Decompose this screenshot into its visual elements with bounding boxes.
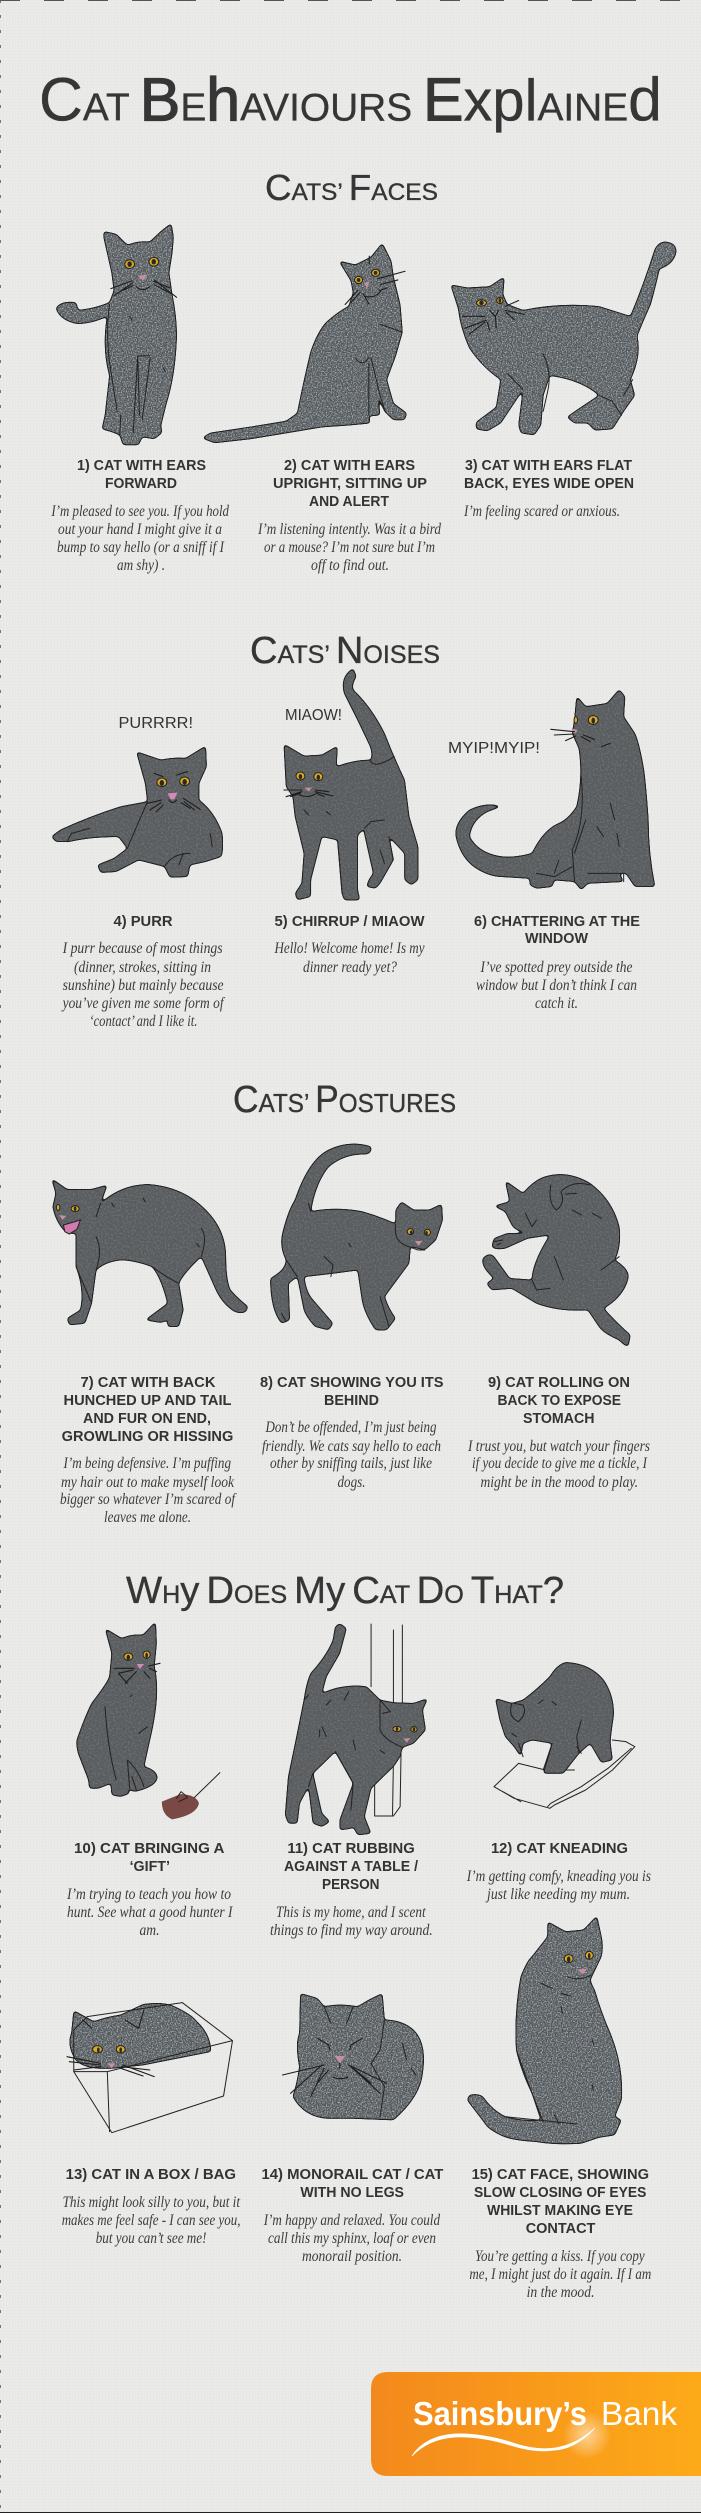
label bbox=[62, 1375, 233, 1445]
description: leaves me alone. bbox=[104, 1509, 191, 1526]
panel: cat 11 bbox=[270, 1623, 433, 1939]
description bbox=[62, 2194, 241, 2247]
label: 14) MONORAIL CAT / CAT bbox=[262, 2167, 444, 2183]
label: 15) CAT FACE, SHOWING bbox=[472, 2167, 649, 2183]
label: 13) CAT IN A BOX / BAG bbox=[66, 2167, 236, 2183]
description: hunt. See what a good hunter I bbox=[67, 1904, 233, 1921]
description: catch it. bbox=[535, 995, 578, 1012]
icon: table leg bbox=[371, 1624, 402, 1816]
description: dogs. bbox=[338, 1474, 366, 1491]
heading: cats' postures: CATS’ POSTURES bbox=[233, 1079, 456, 1121]
description bbox=[263, 2212, 440, 2265]
description bbox=[466, 1868, 651, 1903]
description: This is my home, and I scent bbox=[276, 1904, 426, 1921]
description bbox=[51, 503, 229, 574]
description: Don’t be offended, I’m just being bbox=[265, 1419, 437, 1436]
icon: kneading cat bbox=[495, 1662, 614, 1773]
label: 4) PURR bbox=[114, 914, 173, 930]
description: sunshine) but mainly because bbox=[63, 977, 224, 994]
description: things to find my way around. bbox=[270, 1922, 433, 1939]
logo: Sainsbury's Bank: Sainsbury’s bbox=[413, 2395, 587, 2432]
label: FORWARD bbox=[105, 476, 177, 492]
label: 9) CAT ROLLING ON bbox=[488, 1375, 630, 1391]
label: BEHIND bbox=[324, 1393, 379, 1409]
description: you’ve given me some form of bbox=[61, 995, 226, 1012]
description: monorail position. bbox=[302, 2248, 402, 2265]
description: just like needing my mum. bbox=[485, 1886, 630, 1903]
icon: cat with slow closing eyes bbox=[467, 1916, 622, 2144]
icon: cat with ears forward bbox=[56, 223, 177, 445]
description bbox=[257, 521, 441, 574]
label bbox=[74, 1841, 225, 1875]
description bbox=[262, 1419, 441, 1491]
description bbox=[476, 959, 637, 1012]
description: I’m listening intently. Was it a bird bbox=[257, 521, 441, 538]
description: might be in the mood to play. bbox=[480, 1474, 638, 1491]
icon: hunched cat bbox=[51, 1178, 248, 1327]
title: CAT BEhAVIOURS ExplAINEd bbox=[39, 66, 662, 134]
description bbox=[467, 1438, 650, 1491]
description: This might look silly to you, but it bbox=[63, 2194, 241, 2211]
icon: sitting cat bbox=[77, 1622, 160, 1797]
icon: cat rolling on back bbox=[483, 1174, 630, 1347]
label bbox=[474, 914, 640, 947]
description: if you decide to give me a tickle, I bbox=[472, 1455, 648, 1472]
label: 6) CHATTERING AT THE bbox=[474, 914, 640, 930]
label: UPRIGHT, SITTING UP bbox=[273, 476, 427, 492]
description: makes me feel safe - I can see you, bbox=[62, 2212, 241, 2229]
label: STOMACH bbox=[523, 1411, 594, 1427]
label: 8) CAT SHOWING YOU ITS bbox=[260, 1375, 444, 1391]
panel: cat 15 bbox=[467, 1916, 651, 2301]
description bbox=[274, 940, 425, 976]
label: 7) CAT WITH BACK bbox=[80, 1375, 216, 1391]
label: BACK TO EXPOSE bbox=[498, 1393, 621, 1409]
label bbox=[77, 458, 206, 492]
panel: cat 4 bbox=[51, 715, 226, 1030]
description: ‘contact’ and I like it. bbox=[89, 1013, 197, 1030]
panel: cat 8 bbox=[260, 1144, 444, 1491]
label: 3) CAT WITH EARS FLAT bbox=[465, 458, 632, 474]
icon: cat with ears flat back bbox=[451, 242, 676, 435]
label: HUNCHED UP AND TAIL bbox=[64, 1393, 232, 1409]
description bbox=[61, 940, 226, 1030]
speech: purr: PURRRR! bbox=[118, 715, 193, 732]
label: 11) CAT RUBBING bbox=[287, 1841, 415, 1857]
icon: chirruping cat bbox=[284, 668, 418, 900]
description: dinner ready yet? bbox=[303, 959, 397, 976]
label: AGAINST A TABLE / bbox=[284, 1859, 418, 1875]
panel: cat 2 bbox=[202, 243, 441, 574]
label: CONTACT bbox=[526, 2221, 596, 2237]
panel: cat 5 bbox=[274, 668, 425, 976]
description: I’m getting comfy, kneading you is bbox=[466, 1868, 651, 1885]
description: I’m trying to teach you how to bbox=[66, 1886, 231, 1903]
heading: cats' noises: CATS’ NOISES bbox=[250, 630, 440, 672]
heading: why does my cat do that: WHy DOES My CAT DO THAT? bbox=[126, 1570, 564, 1612]
label: AND ALERT bbox=[309, 494, 389, 510]
label bbox=[464, 458, 634, 492]
label: 10) CAT BRINGING A bbox=[74, 1841, 225, 1857]
label bbox=[260, 1375, 444, 1409]
description: me, I might just do it again. If I am bbox=[469, 2266, 651, 2283]
icon: cat showing its behind bbox=[270, 1144, 443, 1330]
description: or a mouse? I’m not sure but I’m bbox=[264, 539, 435, 556]
icon: mouse bbox=[162, 1773, 220, 1819]
panel: cat 7 bbox=[51, 1178, 248, 1526]
label: WHILST MAKING EYE bbox=[487, 2203, 633, 2219]
description: call this my sphinx, loaf or even bbox=[268, 2230, 436, 2247]
panel: cat 3 bbox=[451, 242, 676, 520]
label bbox=[273, 458, 427, 510]
panel: cat 10 bbox=[66, 1622, 233, 1939]
label bbox=[472, 2167, 649, 2237]
label: WITH NO LEGS bbox=[300, 2185, 404, 2201]
description bbox=[469, 2248, 651, 2301]
label bbox=[284, 1841, 418, 1893]
label: 2) CAT WITH EARS bbox=[284, 458, 415, 474]
speech: myip: MYIP!MYIP! bbox=[448, 740, 540, 757]
speech: miaow: MIAOW! bbox=[285, 707, 342, 724]
label bbox=[262, 2167, 444, 2201]
description: bump to say hello (or a sniff if I bbox=[57, 539, 225, 556]
label: WINDOW bbox=[525, 931, 588, 947]
label: 1) CAT WITH EARS bbox=[77, 458, 206, 474]
label: AND FUR ON END, bbox=[83, 1411, 211, 1427]
logo: Sainsbury's Bank bbox=[371, 2372, 701, 2476]
description: in the mood. bbox=[527, 2284, 594, 2301]
description: I’m pleased to see you. If you hold bbox=[51, 503, 229, 520]
description: I purr because of most things bbox=[62, 940, 223, 957]
panel: cat 6 bbox=[448, 689, 655, 1012]
icon: purring cat bbox=[51, 746, 223, 877]
description: out your hand I might give it a bbox=[58, 521, 222, 538]
label bbox=[488, 1375, 630, 1427]
panel: cat 9 bbox=[467, 1174, 650, 1491]
description: but you can’t see me! bbox=[96, 2230, 206, 2247]
icon: cat rubbing against table bbox=[285, 1623, 428, 1835]
icon: cat in a box bbox=[67, 2003, 232, 2133]
description: (dinner, strokes, sitting in bbox=[74, 959, 211, 976]
description bbox=[66, 1886, 233, 1939]
label: SLOW CLOSING OF EYES bbox=[474, 2185, 647, 2201]
description: I’m feeling scared or anxious. bbox=[463, 503, 620, 520]
heading: cats' faces: CATS’ FACES bbox=[265, 167, 438, 208]
icon: monorail cat bbox=[283, 1993, 424, 2120]
label: GROWLING OR HISSING bbox=[62, 1429, 233, 1445]
description: I trust you, but watch your fingers bbox=[467, 1438, 650, 1455]
description: my hair out to make myself look bbox=[61, 1474, 235, 1491]
description: other by sniffing tails, just like bbox=[270, 1455, 432, 1472]
label: 12) CAT KNEADING bbox=[491, 1841, 628, 1857]
panel: cat 12 bbox=[466, 1662, 651, 1903]
description: I’m being defensive. I’m puffing bbox=[63, 1455, 231, 1472]
description: off to find out. bbox=[311, 557, 389, 574]
icon: cat chattering at the window bbox=[456, 689, 655, 890]
description: I’m happy and relaxed. You could bbox=[263, 2212, 440, 2229]
description: Hello! Welcome home! Is my bbox=[274, 940, 425, 957]
panel: cat 1 bbox=[51, 223, 229, 574]
description: bigger so whatever I’m scared of bbox=[60, 1491, 237, 1508]
icon: cat sitting up and alert bbox=[202, 243, 407, 443]
label: PERSON bbox=[322, 1877, 380, 1893]
label: BACK, EYES WIDE OPEN bbox=[464, 476, 634, 492]
icon: pillow bbox=[494, 1740, 635, 1808]
description: window but I don’t think I can bbox=[476, 977, 637, 994]
description: am. bbox=[140, 1922, 160, 1939]
label: 5) CHIRRUP / MIAOW bbox=[274, 914, 425, 930]
logo: Sainsbury's Bank: Bank bbox=[601, 2395, 678, 2432]
description bbox=[60, 1455, 237, 1526]
description: am shy) . bbox=[117, 557, 165, 574]
description: I’ve spotted prey outside the bbox=[480, 959, 633, 976]
panel: cat 14 bbox=[262, 1993, 444, 2265]
description: You’re getting a kiss. If you copy bbox=[475, 2248, 645, 2265]
label: ‘GIFT’ bbox=[130, 1859, 170, 1875]
description bbox=[270, 1904, 433, 1939]
panel: cat 13 bbox=[62, 2003, 241, 2247]
description: friendly. We cats say hello to each bbox=[262, 1438, 441, 1455]
